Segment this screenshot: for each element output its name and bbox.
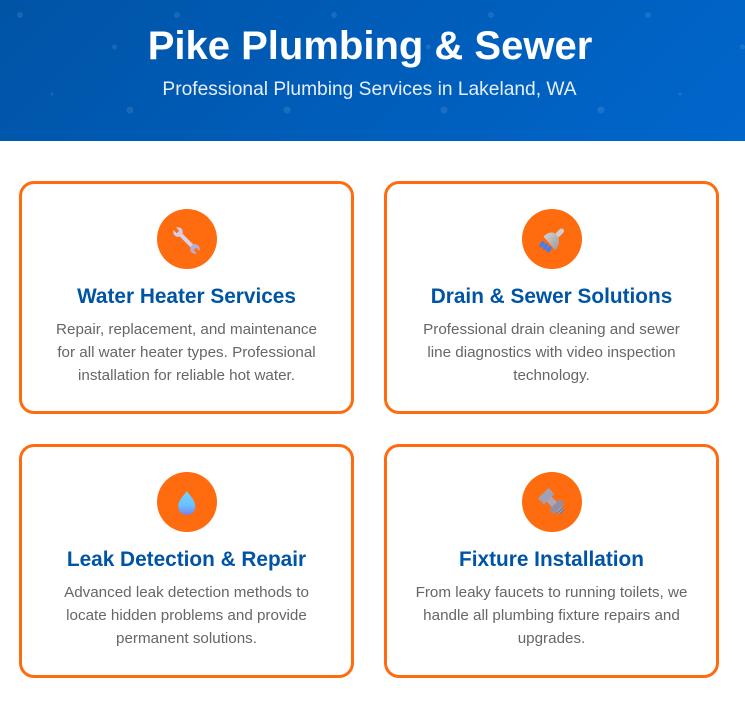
description: From leaky faucets to running toilets, we <box>416 584 687 601</box>
header banner <box>0 0 745 141</box>
description <box>423 321 680 384</box>
description: line diagnostics with video inspection <box>427 344 676 361</box>
heading: Fixture Installation <box>459 548 644 571</box>
description <box>64 584 309 647</box>
subtitle: Professional Plumbing Services in Lakeland, WA <box>162 79 577 100</box>
panel: fixture installation <box>384 444 719 678</box>
description: Repair, replacement, and maintenance <box>56 321 317 338</box>
heading: Leak Detection & Repair <box>67 548 306 571</box>
description <box>56 321 317 384</box>
description: locate hidden problems and provide <box>66 607 307 624</box>
icon: water drop <box>157 472 217 532</box>
description: handle all plumbing fixture repairs and <box>423 607 680 624</box>
description: technology. <box>513 367 590 384</box>
description: upgrades. <box>518 630 585 647</box>
icon: shower head <box>522 209 582 269</box>
description: Advanced leak detection methods to <box>64 584 309 601</box>
icon: wrench <box>157 209 217 269</box>
title: Pike Plumbing & Sewer <box>148 24 592 68</box>
description <box>416 584 687 647</box>
panel: water heater services <box>19 181 354 414</box>
description: permanent solutions. <box>116 630 257 647</box>
description: Professional drain cleaning and sewer <box>423 321 680 338</box>
description: installation for reliable hot water. <box>78 367 295 384</box>
heading: Drain & Sewer Solutions <box>431 285 672 308</box>
panel: drain and sewer solutions <box>384 181 719 414</box>
panel: leak detection and repair <box>19 444 354 678</box>
description: for all water heater types. Professional <box>57 344 316 361</box>
icon: nut and bolt <box>522 472 582 532</box>
heading: Water Heater Services <box>77 285 296 308</box>
